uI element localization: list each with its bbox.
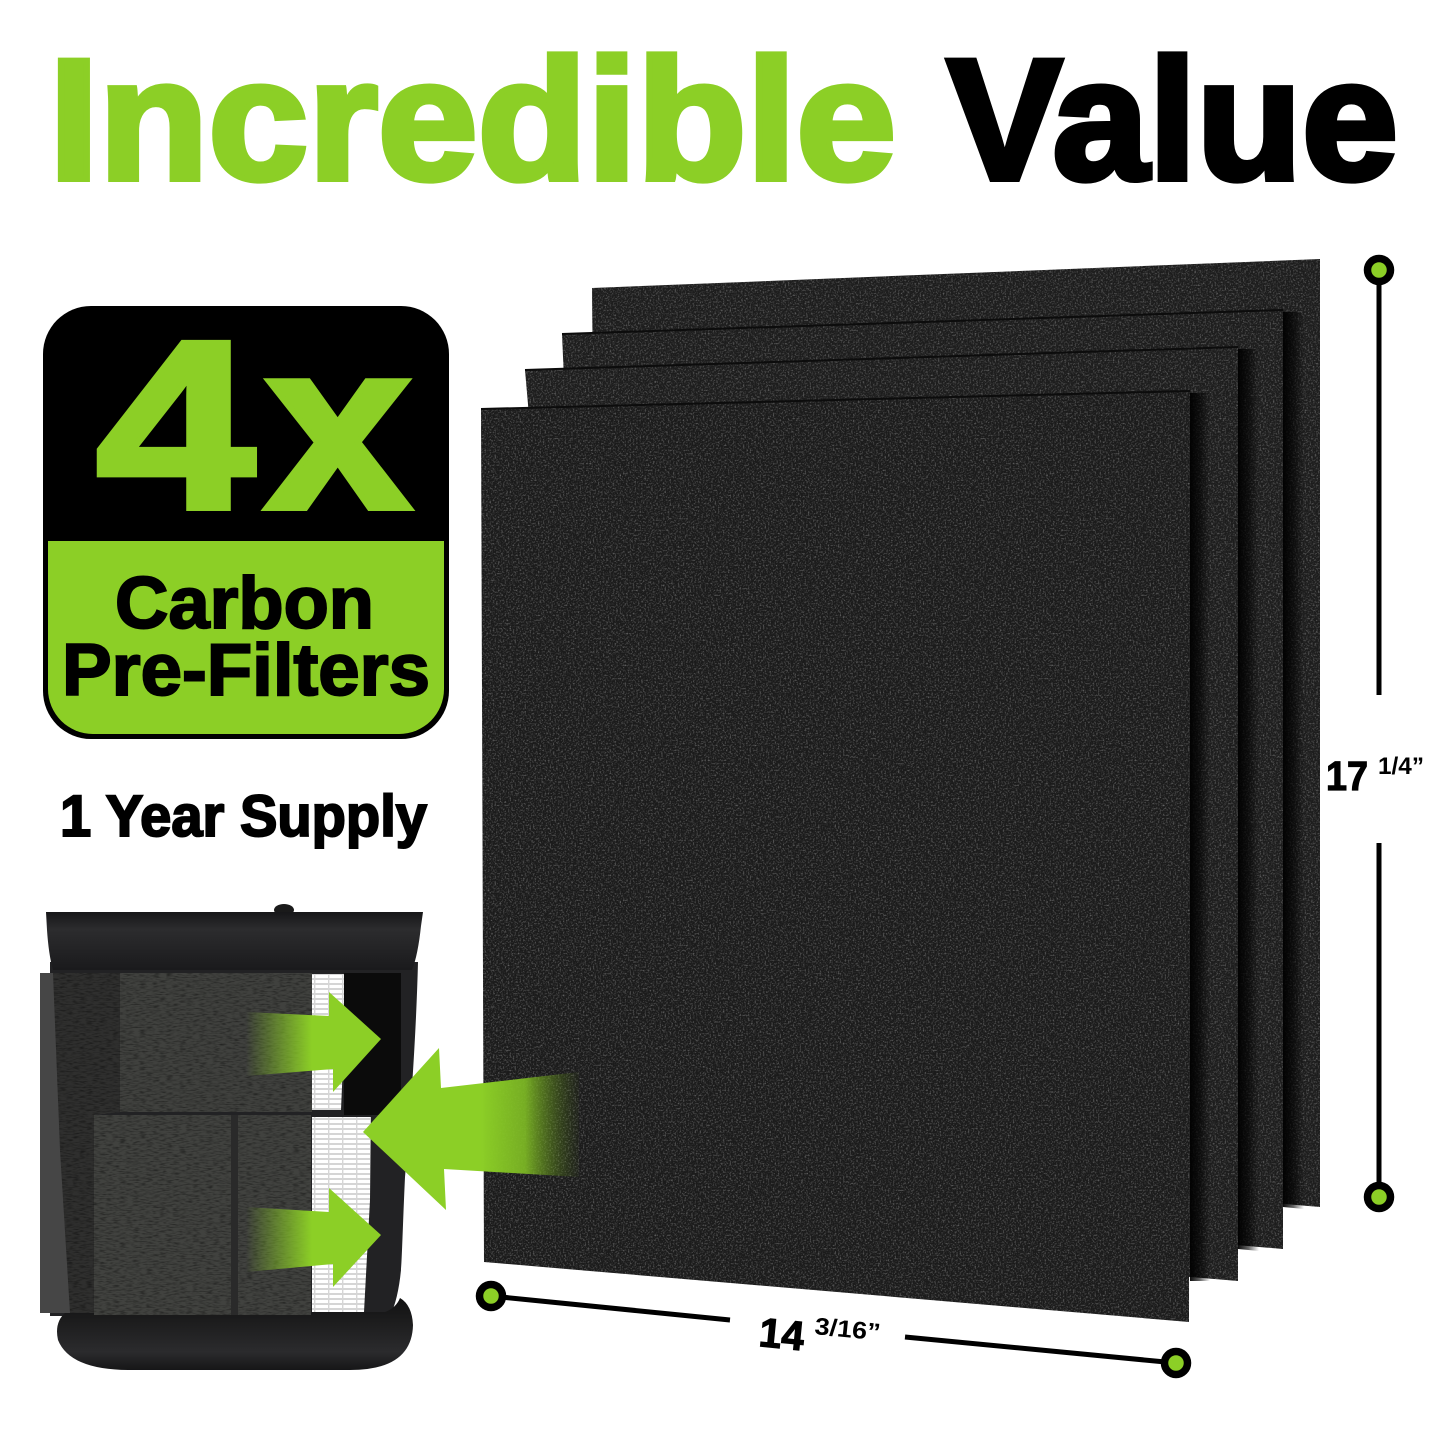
lower HEPA filter [312, 1117, 371, 1312]
purifier body [50, 962, 418, 1316]
purifier base [57, 1298, 413, 1370]
badge numeral: 4 [96, 291, 255, 559]
air purifier illustration [40, 904, 423, 1370]
filter sheet 2 [525, 347, 1238, 1281]
draped outer pre-filter sheet [40, 973, 120, 1313]
height value: 17 [1326, 753, 1368, 799]
purifier lid [46, 912, 423, 970]
arrow: pre-filter insertion [363, 1048, 579, 1210]
width marker right [1164, 1352, 1188, 1374]
title word: Value: Value [947, 24, 1398, 216]
height dimension [1326, 258, 1424, 1208]
lower pre-filter panel right [238, 1115, 311, 1315]
upper pre-filter panel [120, 973, 312, 1112]
filter sheet 3 [562, 310, 1283, 1249]
filter sheet 1 (front) [481, 391, 1190, 1322]
height marker top [1368, 258, 1390, 282]
badge outline [43, 306, 449, 739]
width line [491, 1296, 1176, 1363]
width dimension [480, 1284, 1188, 1374]
lower pre-filter seam [231, 1115, 238, 1315]
filter sheet 4 (back) [592, 259, 1320, 1207]
title [49, 24, 1398, 216]
badge green panel [48, 541, 444, 734]
badge multiplier: x [265, 291, 411, 559]
height fraction: 1/4” [1378, 753, 1424, 780]
title word: Incredible: Incredible [49, 24, 896, 216]
upper HEPA filter [312, 974, 344, 1110]
width value: 14 [757, 1309, 807, 1359]
badge label line 1: Carbon [115, 563, 374, 644]
width fraction: 3/16” [813, 1313, 882, 1346]
filter sheet stack [481, 259, 1320, 1322]
width marker left [480, 1284, 502, 1308]
lower pre-filter panel left [94, 1115, 231, 1315]
purifier top button [274, 904, 294, 916]
upper black interior [344, 973, 401, 1115]
badge label line 2: Pre-Filters [62, 630, 430, 711]
badge: 4x carbon pre-filters [43, 291, 449, 739]
height marker bottom [1368, 1186, 1390, 1208]
arrow: upper airflow [246, 992, 381, 1092]
supply caption: 1 Year Supply [60, 784, 427, 849]
height line [1376, 270, 1382, 1197]
arrow: lower airflow [246, 1188, 381, 1287]
